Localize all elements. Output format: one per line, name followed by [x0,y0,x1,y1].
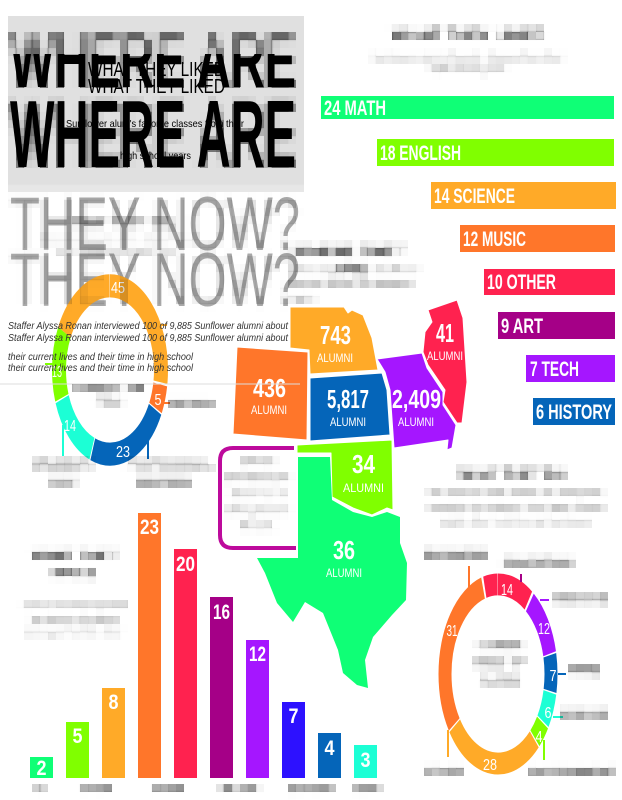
donut chart: left ring: 13 [52,364,62,381]
bar 23: 23 [140,516,159,539]
bar 23 [138,513,161,778]
heading: what they liked: WHAT THEY LIKED [390,25,546,44]
text: what they did description: Education levels of the alumni who were surveyed for this story [39,235,193,259]
bar: 9 art [498,312,615,339]
bar label: none: $0 [36,785,44,794]
intro text: their current lives and their time in high school [8,362,194,374]
label: 7: ARTS [568,664,600,678]
bar: 24 math [321,96,614,120]
title crisp lettering: WHERE ARE [10,16,296,104]
bar: 9 art: 9 ART [501,315,543,338]
label: ring 23: PROFESSIONAL DEGREES [126,459,213,488]
bar: 24 math: 24 MATH [324,97,386,120]
label: ring 14: STUDENTS NOW [33,459,93,488]
intro text: Staffer Alyssa Ronan interviewed 100 of 9,885 Sunflower alumni about [8,332,289,344]
intro text: Staffer Alyssa Ronan interviewed 100 of 9,885 Sunflower alumni about [8,320,289,332]
state: 34 alumni: 34 [352,449,375,479]
label: 14: EDUCATION [502,555,572,569]
bar 2: 2 [36,757,46,780]
state: 41 alumni: ALUMNI [427,349,463,363]
donut chart: left ring [45,280,170,461]
state: 36 alumni [257,457,407,688]
bar: 10 other [484,269,615,295]
bar: 18 english [377,139,614,166]
label: left ring center: CURRENT JOB FIELD [73,383,145,407]
state: 34 alumni [297,440,393,515]
title: pixelated: WHERE ARE [10,16,296,104]
bar label: top: $200K [355,784,381,794]
donut chart: right ring: 6 [544,705,552,722]
bar: 12 music [460,225,615,252]
donut chart: right ring: 4 [536,729,543,746]
state: 5,817 alumni: ALUMNI [330,415,366,429]
title crisp lettering: THEY NOW? [10,238,300,323]
bar label: high: $150-200K [290,784,334,794]
bar: 10 other: 10 OTHER [487,271,556,294]
bar 12 [246,640,269,778]
heading: what they make: WHAT THEY MAKE [30,547,118,582]
subtitle description: high school years [120,150,191,162]
bar label: mid: $40-60K [151,784,185,794]
bar 12: 12 [249,643,266,666]
title crisp lettering: THEY NOW? [10,182,300,267]
donut chart: left ring: 14 [64,418,76,435]
state: 5,817 alumni: 5,817 [327,384,369,414]
donut chart: right ring: 12 [538,621,550,638]
bar: 14 science [431,182,616,209]
bar 20 [174,549,197,778]
state: 36 alumni: 36 [333,535,355,565]
callout: other states: OTHER STATES 3,240 alumni live in other places in the U.S. [225,458,291,533]
state: 36 alumni: ALUMNI [326,566,362,580]
text: what they do description: The kinds of work alumni are doing now, sorted by the industry they have chosen to join after their time at Sunflower [427,488,605,527]
subtitle description [66,118,244,162]
heading: where they are: WHERE THEY ARE [292,242,406,279]
intro text: their current lives and their time in high school [8,351,194,363]
heading: what they do: WHAT THEY DO [459,465,565,481]
state: 41 alumni: 41 [436,318,454,348]
label: ring 5: RETIRED [170,398,214,409]
bar: 7 tech: 7 TECH [530,358,579,381]
label: 4: GOVERNMENT [529,764,615,778]
label: ring center right: CAREER FIELD OF ALUMNI [475,641,525,687]
bar 3: 3 [360,749,370,772]
bar: 12 music: 12 MUSIC [463,228,526,251]
donut chart: right ring [445,566,566,774]
title crisp lettering [10,54,298,306]
state: 743 alumni: 743 [320,320,351,350]
subtitle: what they liked: WHAT THEY LIKED [88,59,225,81]
donut chart: left ring: 23 [116,444,130,461]
state: 2,409 alumni: ALUMNI [398,415,434,429]
title: pixelated: THEY NOW? [10,182,300,267]
bar 8 [102,688,125,778]
bar 20: 20 [176,553,195,576]
subtitle: what they liked [88,59,225,98]
title: pixelated: WHERE ARE [10,81,296,188]
base charts layer: WHERE ARE [10,81,296,188]
donut chart: right ring: 28 [483,757,497,774]
state: 2,409 alumni [377,353,456,450]
state: 2,409 alumni: 2,409 [392,384,441,414]
state: 436 alumni: ALUMNI [251,403,287,417]
state: 34 alumni: ALUMNI [343,481,384,495]
bar 4: 4 [324,737,335,760]
subtitle: what they liked: WHAT THEY LIKED [88,76,225,98]
bar 7: 7 [288,705,298,728]
bar 2 [30,757,53,780]
header gray block [8,16,304,190]
bar 4 [318,733,341,778]
text: what they make description: Annual income reported by alumni who were surveyed for this story [21,601,127,638]
bar 5: 5 [72,725,83,748]
text: favorite classes description: Sunflower alum's favorite classes from their high school years [372,52,564,76]
state: 436 alumni [233,347,308,440]
heading: what they did: WHAT THEY DID [70,215,172,230]
donut chart: right ring: 14 [501,582,513,599]
donut chart: left ring: 5 [154,392,162,409]
bar 16 [210,597,233,778]
bar 3 [354,745,377,778]
state: 436 alumni: 436 [253,373,286,403]
state: 743 alumni: ALUMNI [317,351,353,365]
state: 5,817 alumni [310,373,390,441]
state: 41 alumni [423,300,467,423]
panel: favorite classes bars [321,96,616,425]
map: alumni by state [233,300,467,688]
bar: 18 english: 18 ENGLISH [380,142,461,165]
bar 5 [66,722,89,778]
bar chart: salaries [30,513,377,780]
title: pixelated: THEY NOW? [10,238,300,323]
label: 6: SCIENCE [560,708,608,720]
subtitle description: Sunflower alum's favorite classes from their [66,118,244,130]
state: 743 alumni [290,307,378,374]
bar 7 [282,702,305,778]
donut chart: right ring: 31 [446,623,458,640]
label: 12: MEDICINE [554,594,608,606]
donut chart: left ring: 45 [111,280,125,297]
bar 16: 16 [213,601,230,624]
label: 31: BUSINESS [425,547,487,561]
intro text [8,320,289,374]
donut chart: right ring: 7 [550,668,557,685]
callout box outline [220,448,296,548]
bar label: low: $10-25K [79,784,113,794]
label: 28: OTHER [425,765,463,777]
bar 8: 8 [108,691,119,714]
text: map description: Where alumni from Sunflower live now across the Midwest region [288,266,420,303]
bar label: upper: $80-100K [220,784,260,794]
bar: 14 science: 14 SCIENCE [434,185,515,208]
